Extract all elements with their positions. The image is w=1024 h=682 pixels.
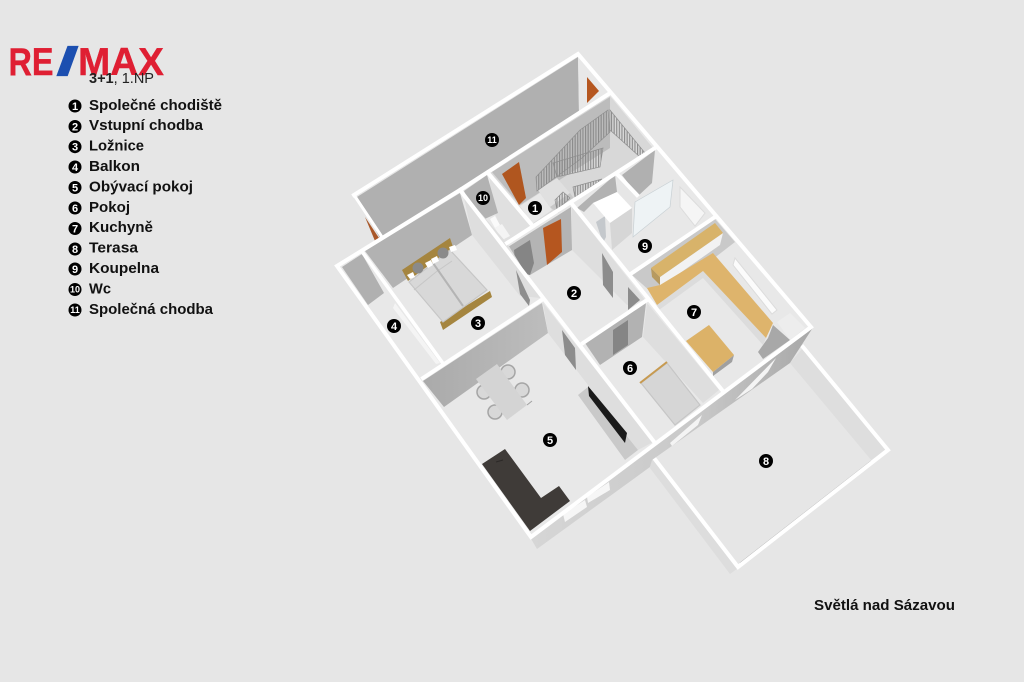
- room number markers: 6: [627, 363, 633, 375]
- legend of rooms: Ložnice: [89, 138, 144, 154]
- room number markers: 1: [532, 203, 538, 215]
- room number markers: 2: [571, 288, 577, 300]
- icon: single bed: [640, 362, 700, 425]
- panel: corridor 11: [357, 57, 610, 241]
- logo: RE/MAX: MAX: [78, 41, 164, 84]
- legend of rooms: 7: [72, 224, 78, 236]
- legend of rooms: 6: [72, 203, 78, 215]
- icon: shower: [633, 180, 673, 237]
- panel: room 6: [585, 303, 719, 425]
- icon: TV console: [578, 386, 638, 460]
- panel: bathroom 9: [577, 150, 705, 250]
- legend of rooms: Wc: [89, 280, 111, 298]
- room number markers: 4: [391, 321, 398, 333]
- panel: kitchen 7: [632, 219, 805, 376]
- legend of rooms: 8: [72, 244, 78, 256]
- logo: RE/MAX: /: [57, 41, 78, 84]
- panel: wc 10: [464, 175, 510, 240]
- icon: kitchen island: [686, 325, 734, 376]
- legend of rooms: 4: [72, 162, 79, 174]
- legend of rooms: Terasa: [89, 240, 139, 256]
- icon: room door: [613, 320, 628, 355]
- icon: living room door: [562, 330, 576, 370]
- icon: double bed: [402, 238, 492, 330]
- panel: hall 2: [508, 207, 645, 310]
- subtitle: layout and floor: 3+1, 1.NP: [89, 71, 154, 87]
- legend of rooms: Pokoj: [89, 199, 130, 216]
- icon: orange door: [543, 219, 562, 265]
- icon: kitchen window: [733, 258, 777, 314]
- panel: terrace: [650, 347, 888, 574]
- room number markers: 7: [691, 307, 697, 319]
- icon: washing machine: [596, 216, 606, 243]
- legend of rooms: 1: [72, 101, 78, 113]
- icon: grey door: [514, 240, 534, 275]
- room number markers: 11: [487, 135, 497, 145]
- room number markers: 8: [763, 456, 769, 468]
- legend of rooms: 9: [72, 264, 78, 276]
- panel: bedroom 3: [365, 193, 541, 330]
- legend of rooms: 11: [70, 305, 80, 315]
- icon: dining table with chairs: [476, 364, 532, 420]
- icon: lower cabinets: [657, 271, 766, 345]
- icon: bathtub: [680, 187, 705, 226]
- panel: stairwell 1: [490, 96, 653, 243]
- logo: RE/MAX: [8, 41, 164, 84]
- panel: flat floor: [337, 93, 812, 537]
- panel: living room 5: [423, 303, 653, 531]
- logo: RE/MAX: RE: [8, 41, 54, 84]
- legend of rooms: Kuchyně: [89, 219, 153, 236]
- room number markers: 10: [478, 193, 488, 203]
- panel: balcony 4: [342, 254, 440, 364]
- room number markers: [387, 133, 773, 468]
- legend of rooms: Balkon: [89, 158, 140, 175]
- floor plan: [337, 54, 888, 574]
- legend of rooms: Obývací pokoj: [89, 178, 193, 196]
- icon: upper cabinets: [651, 223, 723, 287]
- icon: door lower: [365, 217, 379, 241]
- room number markers: 5: [547, 435, 553, 447]
- icon: cabinet: [593, 192, 632, 223]
- legend of rooms: Společné chodiště: [89, 97, 222, 114]
- icon: L-shaped counter: [647, 253, 773, 338]
- icon: entrance door: [502, 162, 526, 205]
- legend of rooms: 5: [72, 182, 78, 194]
- legend of rooms: Společná chodba: [89, 301, 214, 318]
- legend of rooms: Vstupní chodba: [89, 117, 204, 134]
- location label: Světlá nad Sázavou: [814, 597, 955, 614]
- room number markers: 3: [475, 318, 481, 330]
- legend of rooms: Koupelna: [89, 260, 160, 277]
- legend of rooms: 2: [72, 122, 78, 134]
- panel: front exterior wall: [530, 329, 812, 549]
- room number markers: 9: [642, 241, 648, 253]
- white wall tops: [337, 54, 811, 537]
- legend of rooms: 3: [72, 142, 78, 154]
- stair railings: [536, 110, 645, 210]
- legend of rooms: 10: [70, 285, 80, 295]
- icon: door upper: [587, 77, 599, 103]
- icon: corner sofa: [482, 449, 570, 531]
- legend of rooms: [68, 97, 222, 318]
